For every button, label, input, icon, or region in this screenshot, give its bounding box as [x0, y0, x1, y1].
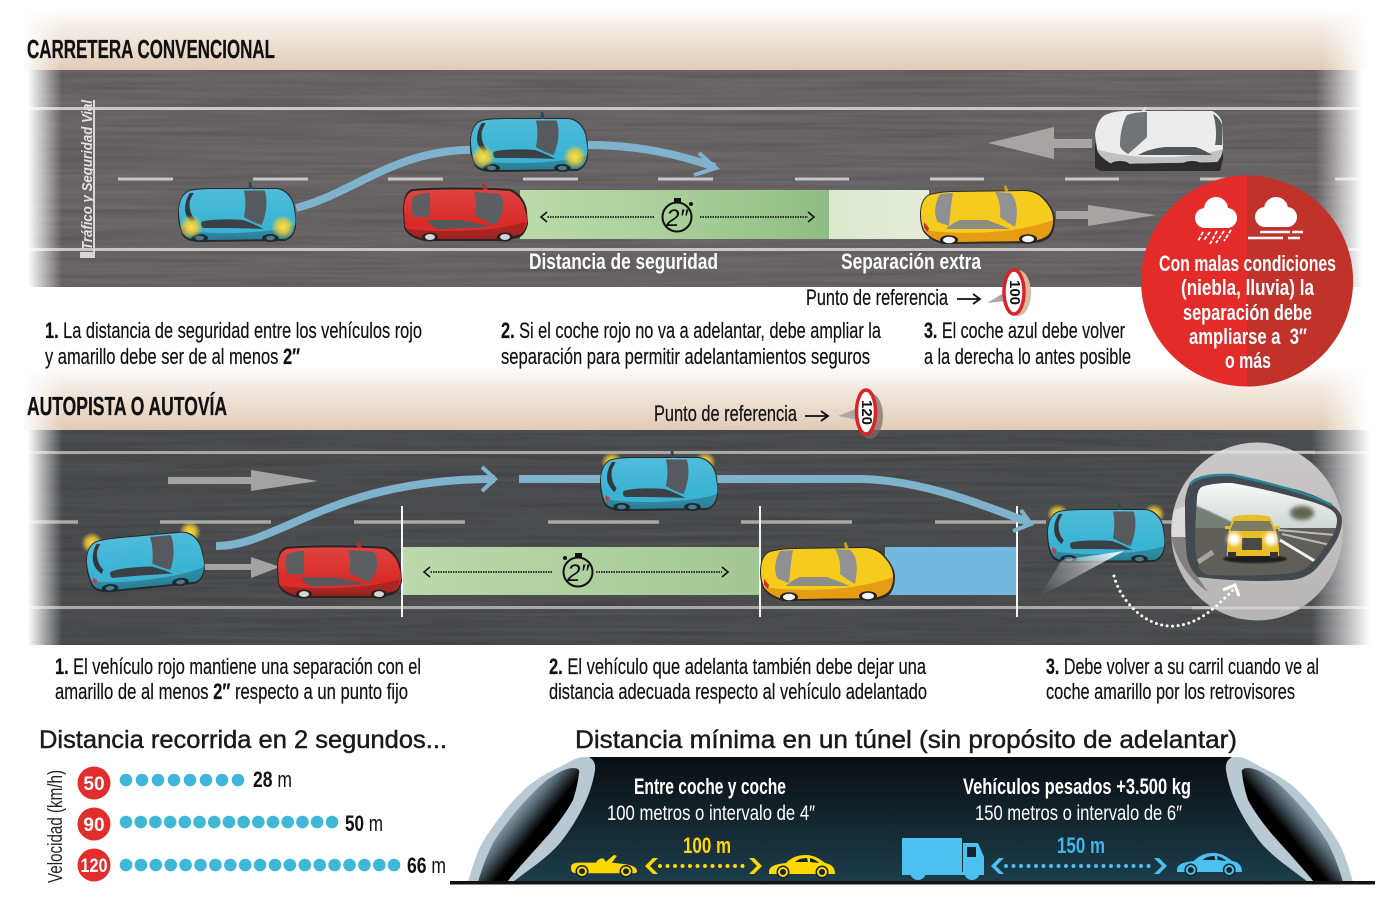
title: carretera convencional: CARRETERA CONVENCIONAL — [27, 34, 275, 64]
text: step 2: 2. Si el coche rojo no va a adelantar, debe ampliar la — [501, 318, 882, 343]
label: 150 m: 150 m — [1057, 833, 1105, 858]
callout text: o más — [1225, 348, 1271, 373]
row: 90 km/h — [78, 808, 383, 840]
title: autopista o autovia: AUTOPISTA O AUTOVÍA — [27, 391, 227, 421]
text: entre coche y coche: 100 metros o intervalo de 4″ — [607, 802, 815, 825]
reference lines — [402, 506, 1017, 617]
row: 120 km/h — [78, 848, 446, 882]
heading: tunel: Distancia mínima en un túnel (sin propósito de adelantar) — [575, 726, 1237, 754]
label: separacion extra: Separación extra — [841, 249, 982, 274]
icon: rain cloud — [1195, 197, 1237, 244]
label: punto de referencia: Punto de referencia — [806, 285, 949, 310]
blue car start — [81, 521, 206, 594]
icon: 120 speed sign — [838, 390, 883, 439]
arrow: 150 m — [991, 858, 1167, 874]
red car — [277, 542, 402, 599]
stopwatch and 2 second arrows — [424, 553, 728, 587]
callout: bad weather circle — [1141, 176, 1353, 386]
credit: tráfico y seguridad vial: Tráfico y Seguridad Vial — [79, 99, 96, 250]
panel: carretera convencional — [0, 10, 1400, 369]
text: step 3: 3. El coche azul debe volver — [924, 318, 1125, 343]
green safety zone — [402, 547, 760, 595]
row: 120 km/h: 66 m — [407, 853, 446, 878]
red car — [403, 184, 528, 242]
arrow: overtaking path — [216, 467, 1031, 546]
row: 120 km/h: 120 — [80, 856, 108, 877]
yellow car — [760, 542, 895, 602]
text: step 2: separación para permitir adelantamientos seguros — [501, 344, 870, 369]
stopwatch and 2 second arrows: 2″ — [665, 205, 689, 232]
icon: 100 speed sign: 100 — [1006, 280, 1023, 305]
text: step 3: a la derecha lo antes posible — [924, 344, 1131, 369]
icon: yellow coupe — [769, 855, 835, 878]
header band: autopista — [0, 366, 1400, 430]
row: 90 km/h: 50 m — [345, 811, 383, 836]
rear view mirror lens — [1171, 442, 1343, 620]
panel: distancia minima en tunel — [450, 726, 1375, 884]
stopwatch and 2 second arrows — [541, 198, 814, 232]
ground line — [450, 881, 1375, 884]
text: vehiculos pesados: 150 metros o intervalo de 6″ — [975, 802, 1182, 825]
text: step 1: 1. El vehículo rojo mantiene una separación con el — [55, 654, 421, 679]
text: entre coche y coche: Entre coche y coche — [634, 774, 786, 799]
arrow: overtaking path — [296, 145, 716, 208]
icon: 100 speed sign — [987, 270, 1031, 316]
text: step 3 — [924, 318, 1131, 369]
mirror housing — [1172, 505, 1187, 537]
row: 50 km/h — [78, 766, 292, 800]
arrow: yellow car direction — [1056, 205, 1156, 226]
text: vehiculos pesados: Vehículos pesados +3.500 kg — [963, 774, 1191, 799]
arrow: 100 m — [645, 858, 762, 874]
label: distancia de seguridad: Distancia de seguridad — [529, 249, 718, 274]
yellow car — [920, 185, 1055, 245]
heading: distancia recorrida: Distancia recorrida en 2 segundos... — [39, 726, 447, 754]
arrow: lane direction — [168, 470, 318, 491]
mirror frame — [1185, 475, 1342, 581]
icon: truck — [902, 838, 984, 880]
panel: autopista o autovia — [0, 366, 1400, 704]
text: step 2: 2. El vehículo que adelanta también debe dejar una — [549, 654, 927, 679]
row: 90 km/h: 90 — [83, 815, 105, 836]
blue car returning — [1047, 503, 1165, 563]
icon: blue car — [1177, 853, 1242, 876]
icon: yellow convertible — [571, 855, 637, 878]
row: 50 km/h: 28 m — [253, 767, 292, 792]
left tunnel portal — [468, 757, 595, 882]
text: step 3 — [1046, 654, 1319, 704]
text: step 1: 1. La distancia de seguridad entre los vehículos rojo — [45, 318, 422, 343]
callout text: Con malas condiciones — [1159, 251, 1336, 276]
axis label: velocidad: Velocidad (km/h) — [45, 770, 67, 883]
panel: distancia recorrida — [39, 726, 447, 883]
callout text: separación debe — [1183, 300, 1312, 325]
mirror reflection — [1195, 483, 1337, 576]
tunnel interior — [480, 757, 1340, 882]
arrow: follow direction — [203, 557, 280, 578]
label: punto de referencia: Punto de referencia — [654, 401, 798, 426]
text: step 1 — [55, 654, 421, 704]
header band: carretera convencional — [0, 10, 1400, 70]
stopwatch and 2 second arrows: 2″ — [566, 560, 590, 587]
text: step 2 — [549, 654, 927, 704]
text: step 2: distancia adecuada respecto al vehículo adelantado — [549, 679, 927, 704]
callout text — [1159, 251, 1336, 373]
white car oncoming — [1090, 107, 1223, 171]
text: step 1: amarillo de al menos 2″ respecto a un punto fijo — [55, 679, 408, 704]
text: step 3: coche amarillo por los retrovisores — [1046, 679, 1295, 704]
blue car overtaking — [600, 451, 718, 511]
blue car start — [178, 182, 296, 242]
vision wedge — [1039, 551, 1124, 597]
callout text: (niebla, lluvia) la — [1181, 275, 1315, 300]
distancia de seguridad green zone — [520, 190, 829, 239]
text: step 1: y amarillo debe ser de al menos 2″ — [45, 344, 300, 369]
blue car overtaking — [470, 112, 588, 172]
separacion extra zone — [829, 190, 929, 239]
text: entre coche y coche — [607, 774, 815, 825]
right tunnel portal — [1226, 757, 1353, 882]
arrow: oncoming direction — [988, 127, 1092, 159]
row: 50 km/h: 50 — [83, 774, 105, 795]
text: vehiculos pesados — [963, 774, 1191, 825]
arrow: dotted look to mirror — [1114, 576, 1239, 626]
text: step 1 — [45, 318, 422, 369]
icon: fog cloud — [1248, 197, 1303, 238]
text: step 2 — [501, 318, 882, 369]
icon: 120 speed sign: 120 — [858, 400, 875, 425]
blue return zone — [885, 547, 1017, 595]
callout text: ampliarse a 3″ — [1189, 324, 1307, 349]
label: 100 m: 100 m — [683, 833, 731, 858]
